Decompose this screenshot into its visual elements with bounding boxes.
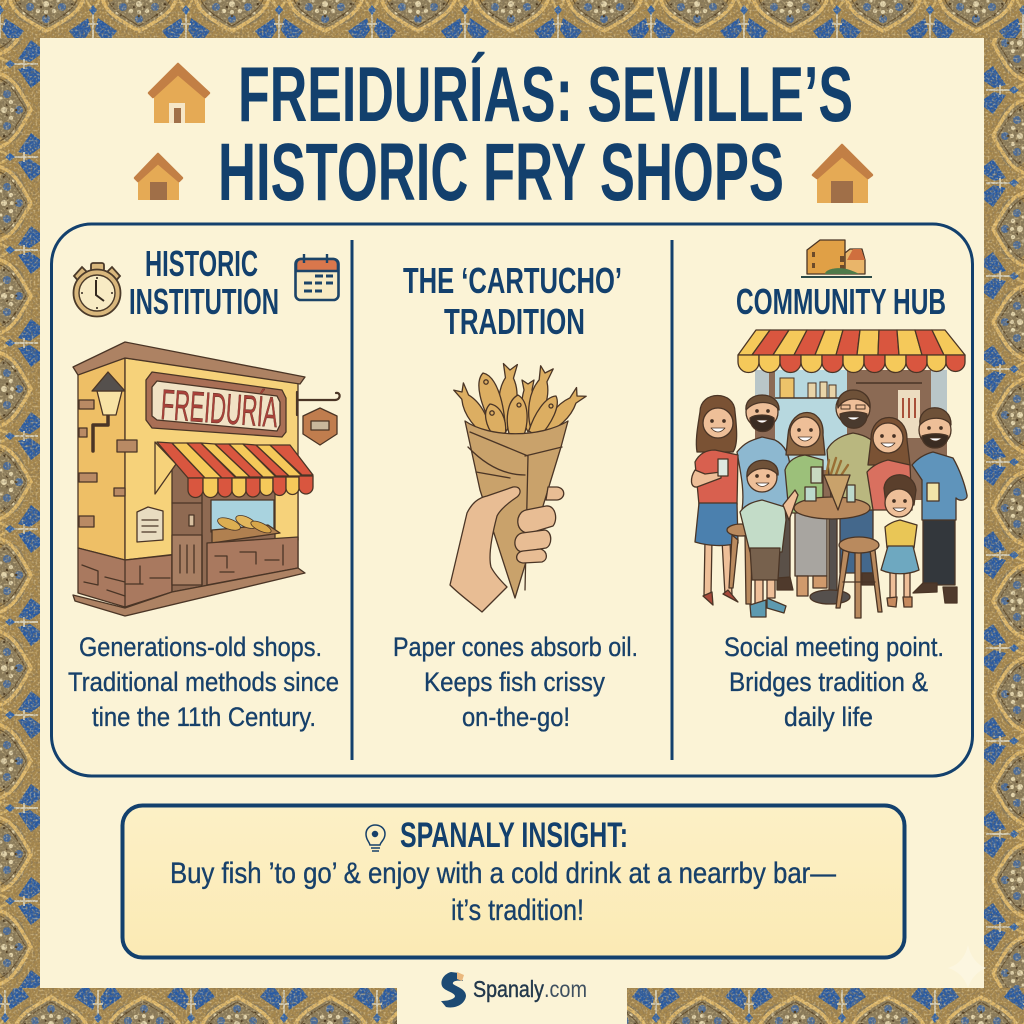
front wall bbox=[125, 358, 298, 560]
man with glasses bbox=[827, 390, 878, 585]
cone of fries on table bbox=[824, 458, 850, 510]
body text: community hub: daily life bbox=[784, 702, 873, 732]
lantern bbox=[92, 372, 125, 451]
callout box bbox=[122, 806, 904, 958]
girl bbox=[881, 475, 919, 607]
body text: community hub bbox=[724, 632, 944, 732]
thumb and hand bbox=[450, 487, 520, 612]
icon: house right bbox=[813, 145, 872, 203]
sign lettering: FREIDURÍA bbox=[159, 381, 280, 437]
heading: the cartucho tradition: THE ‘CARTUCHO’ bbox=[403, 260, 622, 301]
awning stripes bbox=[157, 442, 313, 478]
fish tray bbox=[212, 513, 280, 543]
panel: three column card bbox=[52, 224, 972, 776]
awning side bbox=[155, 442, 176, 494]
title bbox=[218, 50, 853, 218]
door recess bbox=[172, 463, 298, 592]
door bbox=[172, 490, 202, 585]
sign board bbox=[146, 372, 286, 437]
left stool bbox=[727, 524, 755, 604]
logo: spanaly.com bbox=[441, 972, 587, 1007]
insight text bbox=[170, 857, 836, 927]
counter bbox=[207, 537, 298, 585]
illustration: paper cone of fish in hand bbox=[450, 363, 587, 612]
logo mark bbox=[441, 972, 466, 1007]
stall back bbox=[755, 370, 947, 500]
heading: historic institution: INSTITUTION bbox=[129, 281, 279, 322]
panel: spanaly insight callout bbox=[122, 806, 904, 958]
man in blue shirt bbox=[912, 408, 967, 603]
paper cone bbox=[465, 421, 568, 598]
woman in green top bbox=[785, 412, 827, 596]
man in patterned shirt bbox=[737, 395, 793, 590]
body text: community hub: Bridges tradition & bbox=[729, 667, 928, 697]
decorative sparkle watermark bbox=[948, 945, 986, 988]
illustration: freiduria shop bbox=[73, 342, 340, 616]
body text: cartucho tradition bbox=[393, 632, 638, 732]
table bbox=[794, 485, 870, 604]
icon: house top left bbox=[149, 64, 209, 123]
icon: stopwatch bbox=[74, 263, 120, 316]
body text: cartucho tradition: on-the-go! bbox=[462, 702, 570, 732]
plaque bbox=[137, 507, 163, 542]
base bbox=[73, 568, 305, 616]
fish bbox=[451, 363, 587, 443]
insight text: it’s tradition! bbox=[451, 894, 584, 927]
heading: the cartucho tradition: TRADITION bbox=[444, 301, 585, 342]
body text: historic institution: Generations-old shops. bbox=[79, 632, 322, 662]
cornice bbox=[73, 342, 305, 384]
right stool bbox=[836, 537, 882, 618]
right column bbox=[275, 485, 298, 543]
woman in coral top bbox=[867, 418, 912, 510]
fingers bbox=[515, 487, 564, 563]
illustration: community at the fry stall bbox=[691, 330, 967, 618]
awning valance bbox=[188, 476, 313, 498]
body text: cartucho tradition: Paper cones absorb oil. bbox=[393, 632, 638, 662]
body text: historic institution bbox=[68, 632, 339, 732]
boy bbox=[740, 460, 798, 617]
logo wordmark: .com bbox=[544, 976, 587, 1002]
wall bricks bbox=[79, 400, 137, 527]
icon: light bulb bbox=[366, 825, 385, 851]
heading: the cartucho tradition bbox=[403, 260, 622, 342]
icon: calendar bbox=[296, 254, 338, 300]
icon: small town buildings bbox=[801, 240, 872, 277]
insight heading: SPANALY INSIGHT: bbox=[400, 816, 628, 855]
heading: historic institution bbox=[129, 243, 279, 322]
hanging sign bbox=[297, 392, 340, 445]
heading: historic institution: HISTORIC bbox=[145, 243, 258, 284]
body text: historic institution: Traditional methods since bbox=[68, 667, 339, 697]
body text: cartucho tradition: Keeps fish crissy bbox=[424, 667, 605, 697]
insight text: Buy fish ’to go’ & enjoy with a cold drink at a nearrby bar— bbox=[170, 857, 836, 890]
woman in red top bbox=[691, 396, 738, 605]
logo wordmark: Spanaly bbox=[473, 976, 544, 1002]
lower brick walls bbox=[78, 548, 172, 607]
awning bbox=[738, 330, 965, 373]
body text: historic institution: tine the 11th Century. bbox=[92, 702, 316, 732]
window bbox=[211, 500, 274, 532]
left wall bbox=[78, 358, 125, 560]
icon: house bottom left bbox=[135, 154, 182, 200]
body text: community hub: Social meeting point. bbox=[724, 632, 944, 662]
